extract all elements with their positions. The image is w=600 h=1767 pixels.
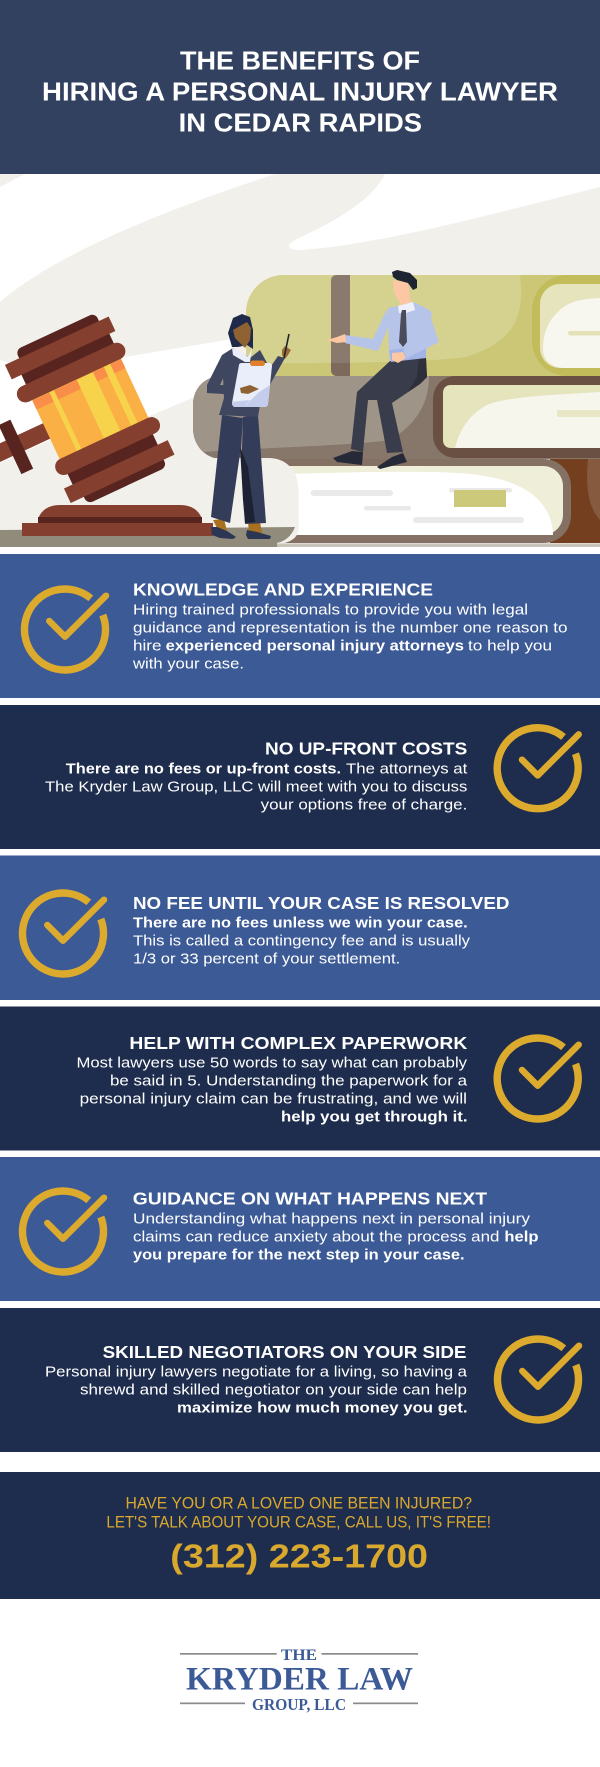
call to action text [106,1494,491,1532]
heading: GUIDANCE ON WHAT HAPPENS NEXT [133,1189,487,1209]
heading: NO FEE UNTIL YOUR CASE IS RESOLVED [133,893,509,913]
title: THE BENEFITS OF [180,47,420,75]
panel: knowledge and experience [0,554,600,698]
heading: SKILLED NEGOTIATORS ON YOUR SIDE [103,1342,466,1362]
body text [132,601,568,672]
body text: There are no fees unless we win your case. [133,914,468,931]
icon: check mark [24,589,106,670]
middle book [193,376,600,459]
logo: The Kryder Law Group, LLC: GROUP, LLC [252,1695,346,1714]
body text: This is called a contingency fee and is usually [133,932,471,949]
logo: The Kryder Law Group, LLC [180,1647,418,1714]
body text: shrewd and skilled negotiator on your side can help [80,1382,467,1399]
title: IN CEDAR RAPIDS [179,110,422,138]
body text [133,914,471,967]
heading: KNOWLEDGE AND EXPERIENCE [133,580,433,600]
title: HIRING A PERSONAL INJURY LAWYER [42,79,558,107]
icon: check mark [22,893,104,974]
body text: 1/3 or 33 percent of your settlement. [133,950,400,967]
body text [76,1055,468,1126]
body text: Understanding what happens next in personal injury [133,1210,531,1227]
bottom book [185,458,600,546]
title banner [0,0,600,174]
call to action text: LET'S TALK ABOUT YOUR CASE, CALL US, IT'S FREE! [106,1513,491,1532]
illustration: lawyers, books and gavel [0,174,600,554]
phone number: (312) 223-1700 [170,1537,428,1574]
icon: check mark [22,1191,104,1272]
body text: Hiring trained professionals to provide you with legal [133,601,528,618]
logo: The Kryder Law Group, LLC: THE [281,1647,317,1664]
logo: The Kryder Law Group, LLC: KRYDER LAW [186,1661,413,1697]
panel: help with complex paperwork [0,1006,600,1150]
body text: Personal injury lawyers negotiate for a living, so having a [45,1364,468,1381]
panel: skilled negotiators on your side [0,1308,600,1452]
body text: hire [133,637,162,654]
body text [133,1210,538,1263]
icon: stack of books [185,275,600,546]
panel: guidance on what happens next [0,1157,600,1301]
icon: check mark [497,1339,579,1420]
body text: experienced personal injury attorneys [166,637,464,654]
body text: with your case. [132,655,244,672]
call to action text: HAVE YOU OR A LOVED ONE BEEN INJURED? [126,1494,472,1513]
body text: Most lawyers use 50 words to say what can probably [76,1055,468,1072]
top book [246,275,600,376]
body text: help you get through it. [281,1109,468,1126]
call to action panel [0,1472,600,1599]
body text: be said in 5. Understanding the paperwork for a [110,1073,468,1090]
body text: maximize how much money you get. [177,1400,468,1417]
gavel head [0,308,178,543]
body text: your options free of charge. [261,796,467,813]
body text: There are no fees or up-front costs. [66,760,341,777]
figure: seated man [327,270,439,469]
body text: personal injury claim can be frustrating, and we will [80,1091,467,1108]
body text [45,760,468,813]
body text [45,1364,468,1417]
body text: to help you [468,637,552,654]
icon: gavel [0,308,213,543]
body text: guidance and representation is the number one reason to [133,619,568,636]
icon: check mark [497,728,579,809]
icon: check mark [497,1038,579,1119]
heading: NO UP-FRONT COSTS [265,739,467,759]
heading: HELP WITH COMPLEX PAPERWORK [129,1033,468,1053]
body text: The attorneys at [346,760,468,777]
body text: The Kryder Law Group, LLC will meet with you to discuss [45,778,467,795]
figure: woman with clipboard [207,314,291,539]
panel: no up-front costs [0,705,600,849]
body text: help [504,1228,538,1245]
panel: no fee until your case is resolved [0,856,600,1000]
title [42,47,558,138]
gavel base [22,505,213,536]
body text: you prepare for the next step in your case. [133,1246,465,1263]
body text: claims can reduce anxiety about the process and [133,1228,499,1245]
ground [0,527,295,547]
